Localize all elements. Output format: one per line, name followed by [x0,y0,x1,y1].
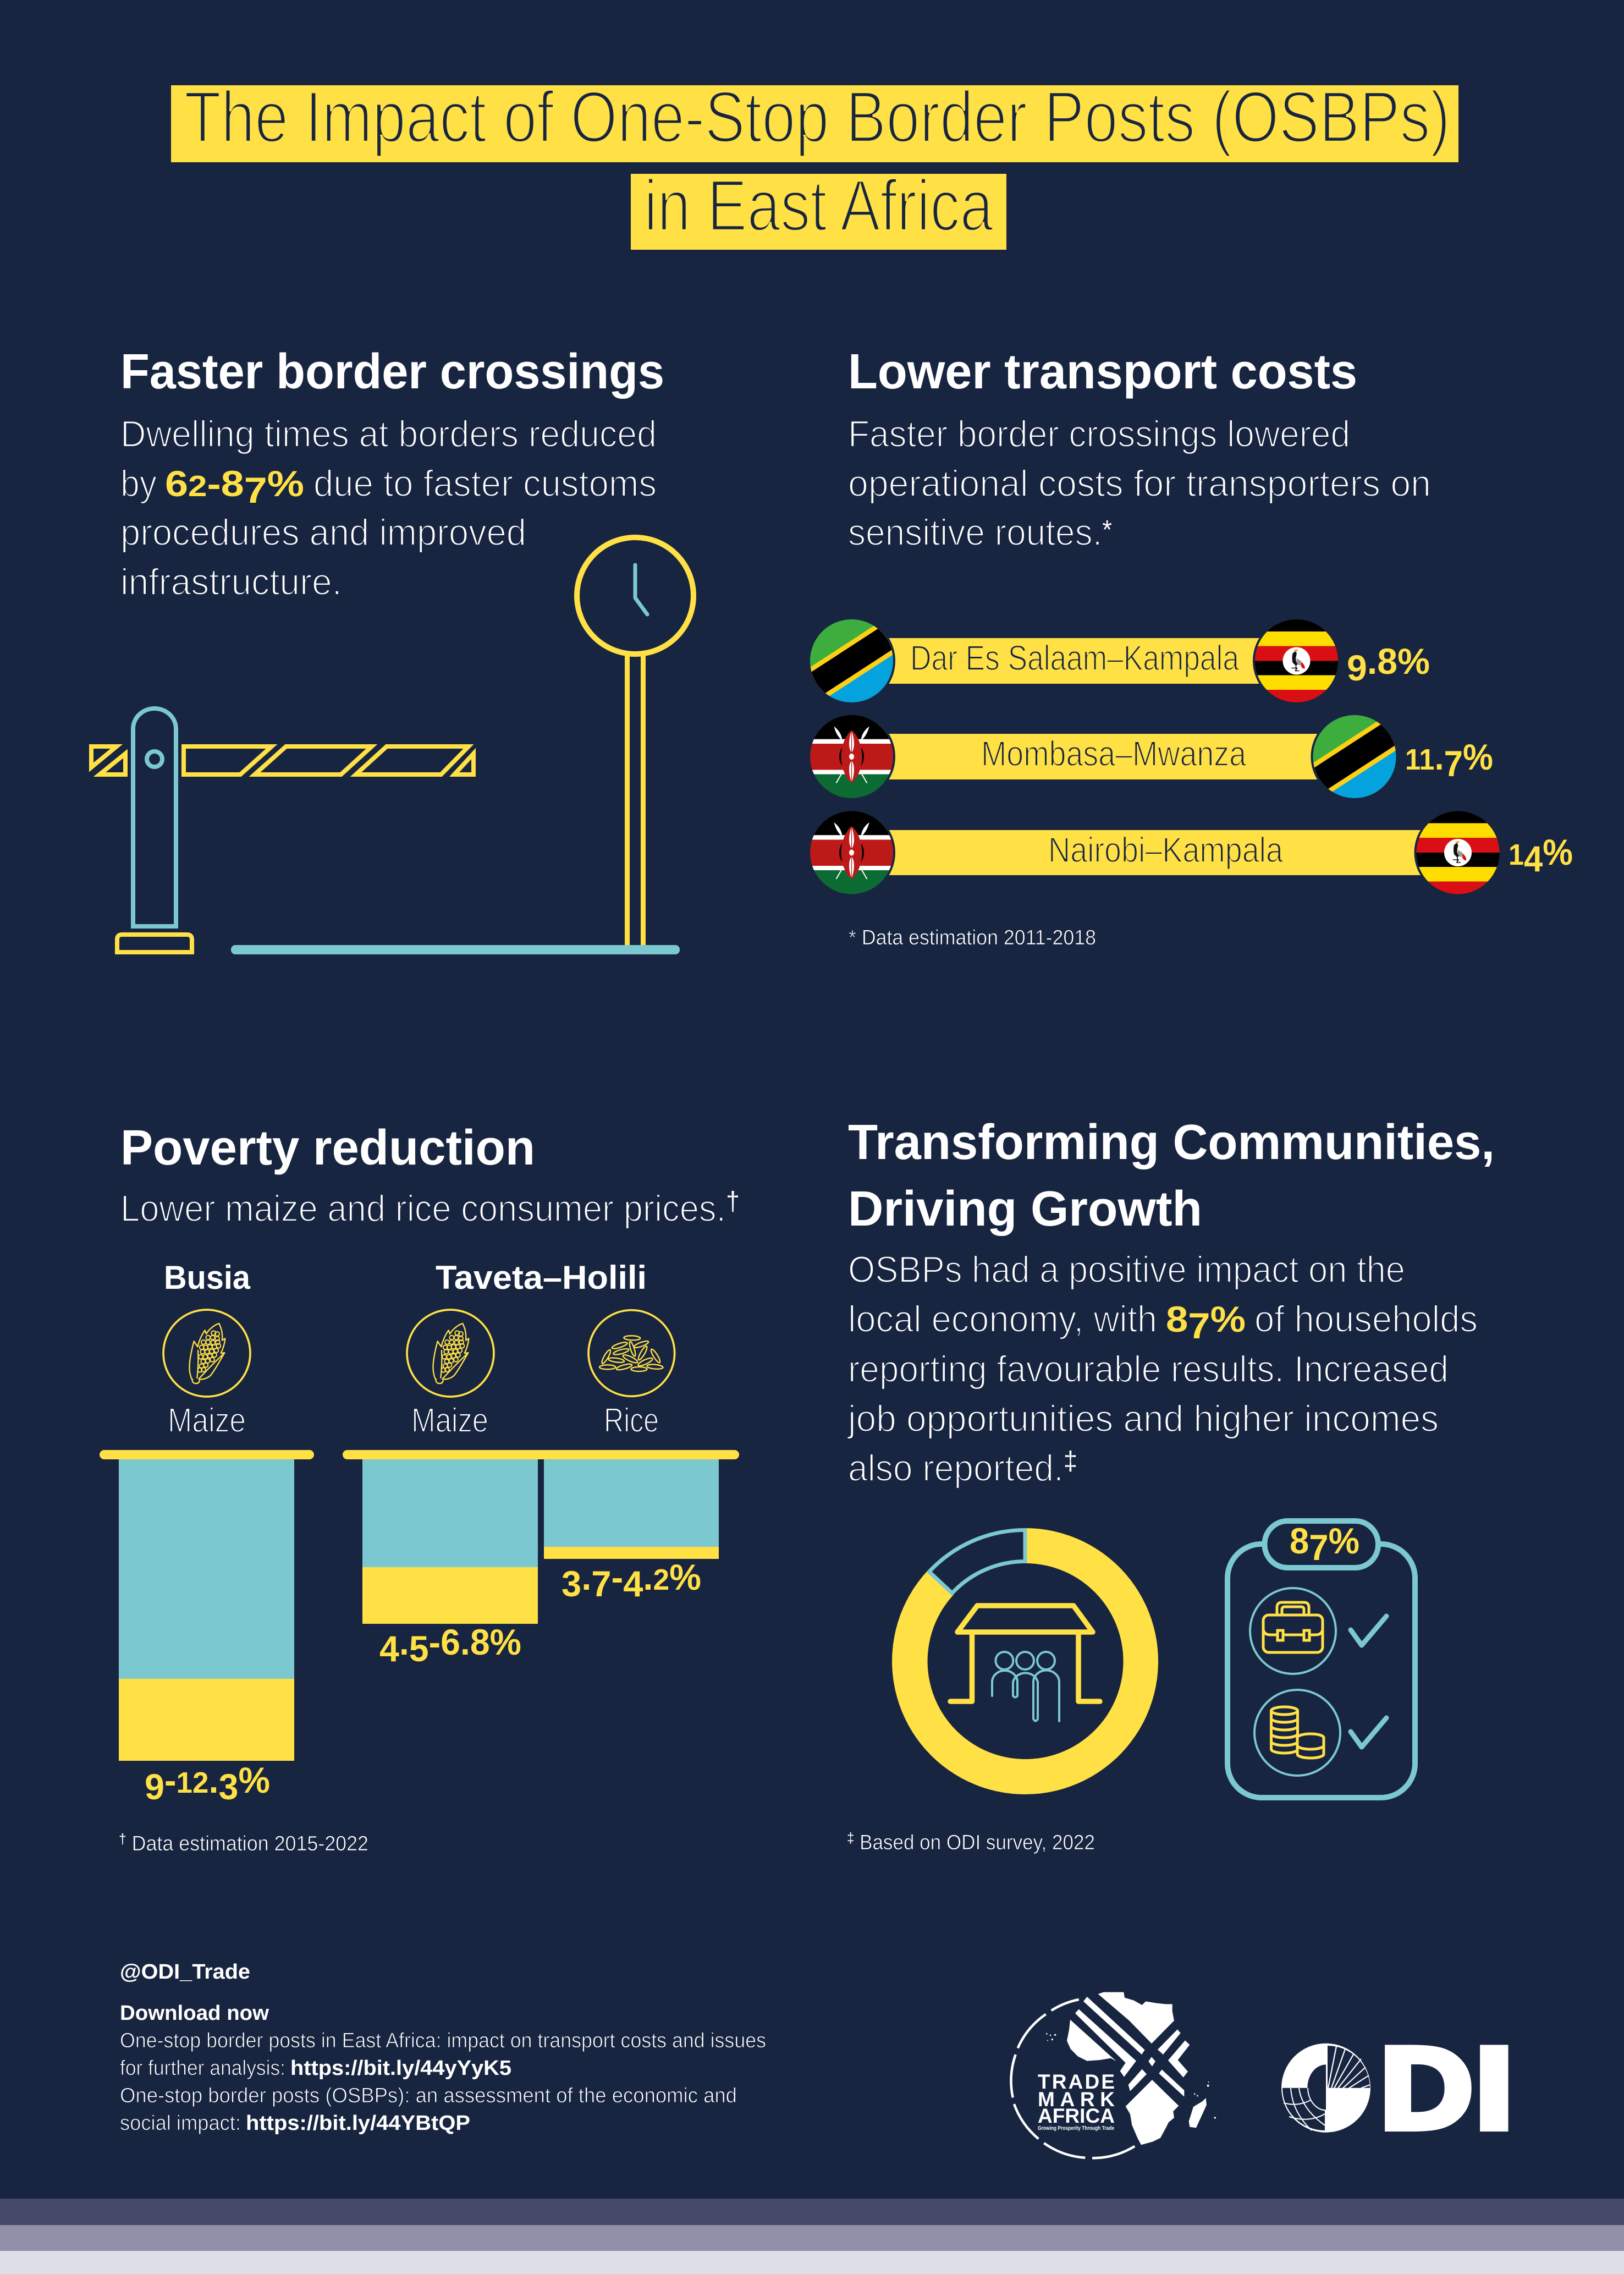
label: Busia: Busia [164,1259,251,1296]
text block: dwelling times: procedures and improved [120,512,526,553]
bar chart: Busia maize: 12. [177,1760,219,1800]
footer text: social impact: [120,2112,241,2135]
route bar: Nairobi-Kampala [807,809,1573,897]
text block: local economy: ‡ [1064,1447,1077,1476]
route bar: Mombasa-Mwanza: Mombasa–Mwanza [981,734,1246,773]
icon: market shelter with people [950,1606,1100,1721]
footer text [120,1960,766,2135]
heading: transforming communities: Transforming Communities, [848,1115,1495,1170]
footer text: for further analysis: [120,2057,285,2080]
route bar: Nairobi-Kampala: 4 [1524,838,1543,879]
bar chart: Taveta-Holili maize and rice: - [612,1557,623,1597]
panel: faster border crossings [91,344,693,954]
route bar: Dar Es Salaam-Kampala [761,570,1430,711]
bar chart: Busia maize [100,1450,314,1807]
text block: local economy: job opportunities and higher incomes [847,1398,1439,1440]
footnote: data estimation 2015-2022: Data estimation 2015-2022 [126,1832,368,1855]
text block: dwelling times: due to faster customs [313,463,657,504]
bar chart: Busia maize: - [164,1760,177,1800]
logo: ODI [1281,2024,1518,2157]
bar chart: Taveta-Holili maize and rice: 5 [409,1628,429,1669]
text block: local economy: reporting favourable results. Increased [848,1348,1449,1390]
text block: local economy: OSBPs had a positive impact on the [848,1249,1405,1290]
heading: lower transport costs: Lower transport costs [848,344,1357,399]
footnote: ODI survey: ‡ [847,1830,854,1846]
label: maize (Busia): Maize [168,1402,246,1440]
bar chart: Taveta-Holili maize and rice: -6.8% [429,1622,521,1662]
bar chart: Busia maize: 3 [218,1766,238,1807]
footer text: Download now [120,2002,269,2025]
icon: maize (Busia) [163,1310,250,1397]
text block: local economy: also reported. [848,1447,1077,1489]
bar chart: Taveta-Holili maize and rice: 7 [591,1563,612,1604]
route bar: Dar Es Salaam-Kampala: Dar Es Salaam–Kampala [910,638,1239,678]
heading: faster border crossings: Faster border crossings [120,344,664,399]
bar chart: Taveta-Holili maize and rice: . [643,1557,653,1597]
text block: dwelling times [120,413,657,603]
footer colour bands [0,2199,1624,2274]
route bar: Nairobi-Kampala: 1 [1509,838,1524,871]
footer text: One-stop border posts (OSBPs): an assessment of the economic and [120,2084,737,2107]
text block: dwelling times: % [267,463,304,504]
title: in East Africa [644,165,993,246]
icon: survey clipboard [1227,1520,1415,1798]
bar chart: Busia maize: 9 [145,1766,164,1807]
text block: local economy: % [1210,1299,1246,1339]
text block: consumer prices: Lower maize and rice consumer prices. [120,1188,771,1229]
text block: dwelling times: infrastructure. [120,561,342,603]
logo: TradeMark Africa: Growing Prosperity Through Trade [1038,2125,1114,2132]
text block: local economy: 7 [1188,1305,1210,1346]
icon: maize (Taveta-Holili) [407,1310,494,1397]
bar chart: Taveta-Holili maize and rice: . [581,1557,591,1597]
footer text: https://bit.ly/44yYyK5 [290,2057,511,2080]
bar chart: Taveta-Holili maize and rice: 4 [379,1628,399,1669]
footnote: data estimation 2011-2018: * Data estimation 2011-2018 [849,926,1096,949]
bar chart: Taveta-Holili maize and rice: 2% [653,1557,702,1597]
text block: operational costs: operational costs for transporters on [848,463,1431,504]
footnote: data estimation 2015-2022: † [119,1831,126,1847]
route bar: Nairobi-Kampala: % [1543,832,1573,872]
heading: transforming communities [848,1115,1495,1237]
text block: operational costs: * [1102,515,1112,545]
bar chart: Taveta-Holili maize and rice: . [399,1622,409,1662]
icon: clock on pole [577,537,693,946]
text block: local economy [847,1249,1478,1489]
footer text: One-stop border posts in East Africa: impact on transport costs and issues [120,2029,766,2052]
text block: local economy: 8 [1166,1299,1186,1339]
panel: lower transport costs [761,344,1573,949]
panel: transforming communities [847,1115,1495,1854]
ground line [231,945,680,954]
footnote: ODI survey: Based on ODI survey, 2022 [854,1831,1095,1854]
footer text: @ODI_Trade [120,1960,250,1984]
bar chart: Taveta-Holili maize and rice [343,1450,739,1669]
label: maize (Taveta-Holili): Maize [411,1402,488,1440]
bar chart: Taveta-Holili maize and rice: 4 [623,1563,643,1604]
icon: survey clipboard: 7 [1309,1527,1329,1568]
icon: survey clipboard: % [1329,1520,1359,1561]
route bar: Dar Es Salaam-Kampala: 9 [1347,647,1367,688]
label: rice: Rice [604,1402,659,1440]
text block: operational costs [848,413,1431,553]
text block: dwelling times: 62-8 [165,463,239,504]
route bar: Dar Es Salaam-Kampala: .8% [1367,641,1430,682]
text block: dwelling times: Dwelling times at borders reduced [120,413,657,455]
logo: TradeMark Africa: AFRICA [1038,2105,1115,2127]
logo: TradeMark Africa: TRADE [1038,2070,1115,2093]
footer text: https://bit.ly/44YBtQP [246,2112,470,2135]
logo: TradeMark Africa [1011,1992,1216,2158]
text block: local economy: of households [1254,1298,1478,1340]
panel: poverty reduction [100,1120,740,1855]
bar chart: Busia maize: % [238,1760,270,1800]
route bar: Mombasa-Mwanza: 7 [1444,743,1463,784]
text block: consumer prices: † [726,1187,740,1216]
route bar: Mombasa-Mwanza: % [1463,737,1493,777]
route bar: Mombasa-Mwanza [807,666,1493,807]
icon: survey clipboard: 8 [1290,1520,1310,1561]
text block: dwelling times: 7 [244,470,267,510]
bar chart: Taveta-Holili maize and rice: 3 [561,1563,581,1604]
logo: ODI: D [1375,2024,1476,2157]
label: Taveta-Holili: Taveta–Holili [436,1259,647,1296]
icon: rice [588,1310,675,1396]
text block: local economy: local economy, with [848,1298,1157,1340]
text block: operational costs: Faster border crossings lowered [848,413,1350,455]
logo: TradeMark Africa: MARK [1038,2088,1115,2111]
text block: dwelling times: by [120,463,157,504]
title [171,76,1458,250]
text block: operational costs: sensitive routes. [848,512,1118,553]
route bar: Nairobi-Kampala: Nairobi–Kampala [1048,830,1283,870]
icon: border barrier [91,708,474,952]
route bar: Mombasa-Mwanza: 11. [1405,737,1445,777]
donut chart: 87 percent [892,1528,1158,1794]
heading: transforming communities: Driving Growth [848,1182,1202,1237]
heading: poverty reduction: Poverty reduction [120,1120,535,1176]
logo: ODI: I [1470,2024,1518,2157]
